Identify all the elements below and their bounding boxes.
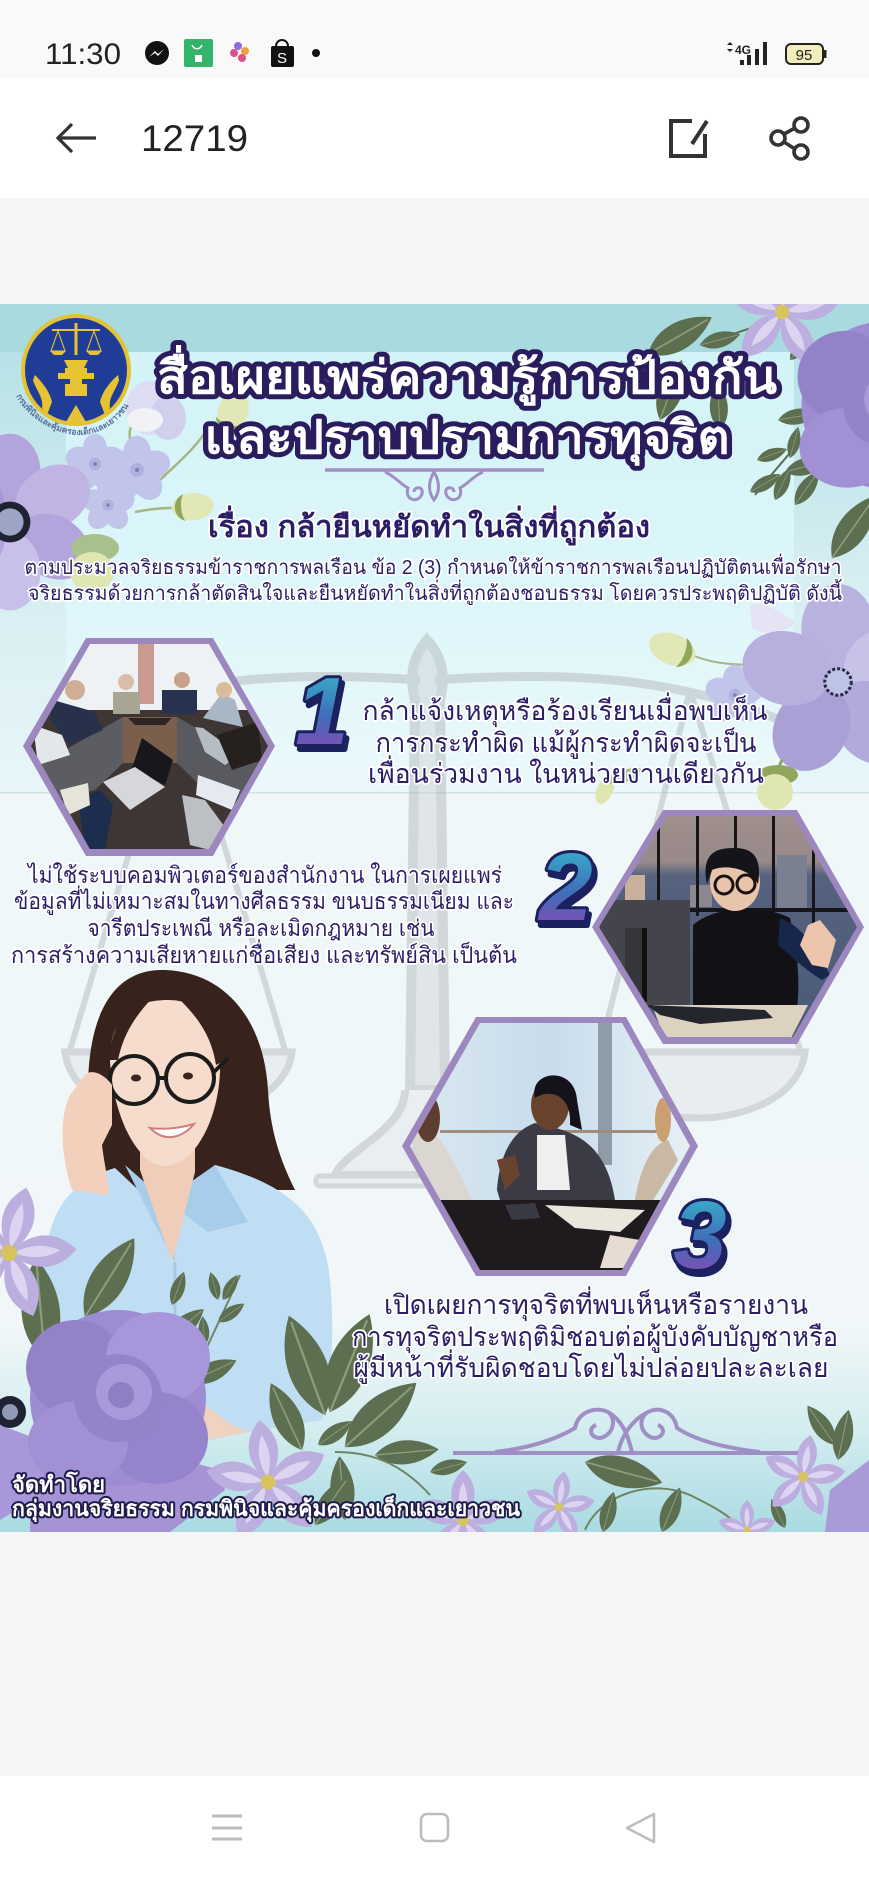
- step 2 text: จารีตประเพณี หรือละเมิดกฎหมาย เช่น: [88, 915, 435, 941]
- title: [157, 345, 778, 466]
- step 1 text: เพื่อนร่วมงาน ในหน่วยงานเดียวกัน: [368, 755, 764, 789]
- woman with glasses photo: [35, 970, 332, 1440]
- title: สื่อเผยแพร่ความรู้การป้องกัน: [157, 345, 778, 406]
- central woman: [497, 1123, 615, 1200]
- icon: back arrow: [58, 124, 96, 152]
- title: และปราบปรามการทุจริต: [204, 411, 730, 466]
- icon: home: [421, 1814, 448, 1841]
- app bar: [0, 78, 869, 198]
- credit: จัดทำโดย: [12, 1471, 105, 1497]
- intro paragraph: [24, 553, 842, 606]
- status bar: [0, 0, 869, 78]
- icon: menu: [212, 1816, 242, 1839]
- hexagon photo: woman at computer: [590, 810, 865, 1045]
- panel: infographic poster: [0, 304, 869, 1532]
- hexagon photo: meeting room: [20, 630, 280, 860]
- seal curved text: [16, 392, 136, 435]
- step 2 text: [11, 862, 517, 968]
- step 3 text: [352, 1286, 838, 1384]
- woman: [693, 909, 798, 1008]
- credit: กลุ่มงานจริยธรรม กรมพินิจและคุ้มครองเด็กและเยาวชน: [12, 1494, 520, 1523]
- step 1 text: การกระทำผิด แม้ผู้กระทำผิดจะเป็น: [376, 725, 756, 759]
- foreground arms and papers: [78, 790, 113, 850]
- step 1: [20, 630, 768, 860]
- subtitle: เรื่อง กล้ายืนหยัดทำในสิ่งที่ถูกต้อง: [208, 505, 650, 546]
- watermark: scales of justice: [65, 640, 805, 1186]
- left and right colleagues: [412, 1120, 472, 1200]
- poster background: [0, 304, 869, 1532]
- icon: network signal: [727, 42, 767, 65]
- icon: colourful star: [230, 42, 249, 62]
- credit: [12, 1471, 520, 1523]
- seated people: [50, 700, 103, 745]
- step 3 text: การทุจริตประพฤติมิชอบต่อผู้บังคับบัญชาหรือ: [352, 1322, 838, 1354]
- step 1 text: กล้าแจ้งเหตุหรือร้องเรียนเมื่อพบเห็น: [362, 692, 768, 728]
- step 3: [352, 1015, 838, 1384]
- step 2: [11, 810, 865, 1045]
- viewer background: [0, 198, 869, 304]
- step 1 text: [362, 692, 768, 789]
- table: [425, 1200, 665, 1270]
- logo: department seal: [16, 314, 131, 436]
- face: [110, 1000, 220, 1166]
- flowers: bottom: [0, 1170, 869, 1567]
- hair back: [88, 970, 295, 1190]
- navigation bar: [0, 1776, 869, 1883]
- logo: department seal: กรมพินิจและคุ้มครองเด็กและเยาวชน: [16, 394, 128, 436]
- number 2: 2: [537, 834, 593, 941]
- glasses: [110, 1054, 228, 1104]
- smile: [150, 1124, 194, 1137]
- seal emblem: [33, 323, 119, 422]
- desk and keyboard: [652, 1005, 808, 1040]
- intro paragraph: ตามประมวลจริยธรรมข้าราชการพลเรือน ข้อ 2 (3) กำหนดให้ข้าราชการพลเรือนปฏิบัติตนเพื่อรักษา: [24, 553, 842, 579]
- flowers: mid right: [591, 584, 869, 810]
- number 1: 1: [295, 658, 349, 765]
- monitor: [600, 900, 690, 1008]
- viewer background lower: [0, 1532, 869, 1776]
- intro paragraph: จริยธรรมด้วยการกล้าตัดสินใจและยืนหยัดทำในสิ่งที่ถูกต้องชอบธรรม โดยควรประพฤติปฏิบัติ ดังนี้: [28, 579, 842, 606]
- shirt: [35, 1165, 332, 1440]
- step 2 text: การสร้างความเสียหายแก่ชื่อเสียง และทรัพย์สิน เป็นต้น: [11, 939, 517, 968]
- step 2 text: ไม่ใช้ระบบคอมพิวเตอร์ของสำนักงาน ในการเผยแพร่: [26, 862, 502, 888]
- flowers: top left: [0, 381, 254, 610]
- laptops: [132, 738, 173, 785]
- neck: [140, 1148, 195, 1262]
- icon: shopee bag: [271, 40, 294, 67]
- notification dot: [312, 49, 320, 57]
- icon: messenger: [145, 41, 169, 65]
- icon: network signal: 4G: [735, 43, 751, 57]
- icon: share: [771, 118, 808, 159]
- icon: back: [627, 1814, 654, 1842]
- step 2 text: ข้อมูลที่ไม่เหมาะสมในทางศีลธรรม ขนบธรรมเนียม และ: [14, 885, 514, 915]
- step 3 text: เปิดเผยการทุจริตที่พบเห็นหรือรายงาน: [384, 1286, 808, 1322]
- icon: battery 95: [786, 44, 826, 64]
- number 3: 3: [673, 1182, 727, 1289]
- ornament: title divider: [325, 470, 544, 500]
- hand: [63, 1072, 112, 1195]
- hexagon photo: office discussion: [400, 1015, 700, 1280]
- icon: green app: [184, 39, 213, 67]
- icon: battery 95: 95: [796, 47, 812, 64]
- ornament: bottom divider: [453, 1410, 798, 1453]
- icon: edit: [671, 121, 707, 156]
- eyes: [131, 1072, 193, 1082]
- flowers: top right: [650, 304, 869, 558]
- step 3 text: ผู้มีหน้าที่รับผิดชอบโดยไม่ปล่อยปละละเลย: [354, 1349, 828, 1384]
- clock: 11:30: [45, 38, 121, 71]
- file name: 12719: [141, 118, 248, 159]
- icon: shopee bag: S: [277, 50, 287, 67]
